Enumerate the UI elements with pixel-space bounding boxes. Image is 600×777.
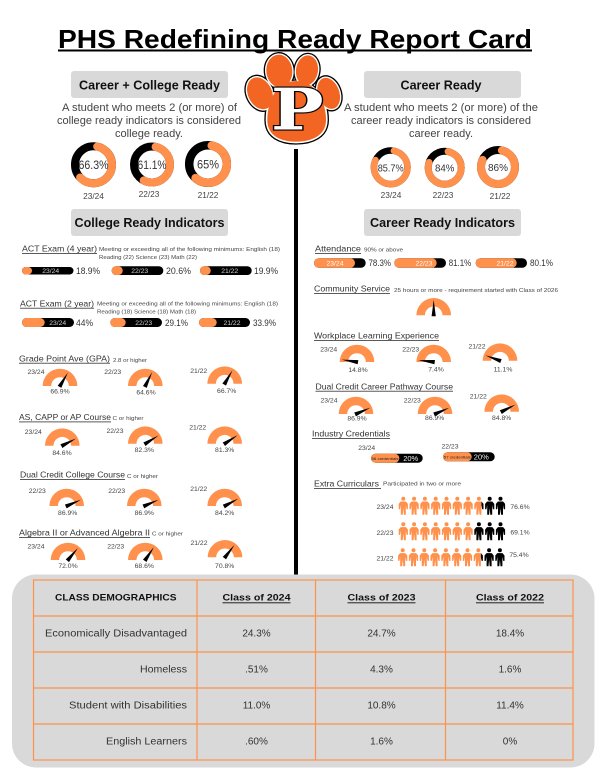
- bar: 22/23 29.1%: [110, 318, 188, 328]
- gauge: 23/24 84.6%: 84.6%: [52, 450, 72, 457]
- heading: Career Ready: Career Ready: [400, 78, 482, 92]
- table header: CLASS DEMOGRAPHICS: [55, 593, 176, 604]
- pictogram: 22/23 69.1%: 22/23: [376, 530, 394, 537]
- gauge: 23/24 14.8%: [320, 345, 374, 374]
- panel: ACT Exam 4 year: [22, 244, 280, 276]
- pictogram: 23/24 76.6%: 23/24: [376, 504, 394, 511]
- bar: 22/23 29.1%: 29.1%: [165, 318, 188, 328]
- bar: 22/23 20.6%: [112, 266, 191, 276]
- donut: college 23/24 66.3%: 66.3%: [78, 160, 108, 172]
- row: Homeless: .51%: [245, 665, 268, 676]
- gauge: 22/23 86.9%: 22/23: [29, 488, 46, 495]
- gauge: 22/23 86.9%: 86.9%: [58, 510, 77, 517]
- panel: Dual Credit College Course: [20, 470, 242, 517]
- panel: AS, CAPP or AP Course: [19, 412, 242, 457]
- heading: College Ready Indicators: [71, 209, 228, 236]
- panel: Extra Curriculars: [314, 479, 530, 566]
- text block: college ready definition: A student who meets 2 (or more) of: [62, 102, 238, 114]
- bar: 21/22 80.1%: 21/22: [496, 260, 514, 267]
- gauge: 21/22 66.7%: [190, 366, 242, 395]
- donut: college 21/22 65%: [189, 145, 227, 200]
- table header: Class of 2023: [348, 593, 416, 604]
- pictogram: 22/23 69.1%: 69.1%: [510, 530, 530, 537]
- gauge: 21/22 81.3%: 81.3%: [215, 447, 234, 454]
- row: Economically Disadvantaged: [45, 629, 524, 640]
- text block: college ready definition: college ready.: [115, 128, 183, 140]
- row: Student with Disabilities: [69, 701, 524, 712]
- bar: 21/22 33.9%: 33.9%: [253, 318, 276, 328]
- text block: career ready definition: career ready indicators is considered: [351, 115, 531, 127]
- gauge: 23/24 72.0%: [27, 543, 85, 570]
- panel: Dual Credit Career Pathway Course: [316, 381, 519, 422]
- donut: career 23/24 85.7%: 85.7%: [378, 162, 404, 174]
- bar: 21/22 33.9%: 21/22: [223, 320, 241, 327]
- gauge: 21/22 11.1%: [468, 343, 517, 374]
- panel: Algebra II: [19, 528, 242, 570]
- row: English Learners: 0%: [503, 737, 517, 748]
- bar: 23/24 44%: [22, 318, 93, 328]
- bar: 23/24 18.9%: 18.9%: [76, 266, 100, 276]
- gauge: 23/24 72.0%: 23/24: [27, 543, 45, 550]
- heading: Career Ready Indicators: [364, 209, 521, 236]
- heading: Career Ready: [364, 71, 521, 98]
- gauge: 22/23 86.9%: 86.9%: [425, 415, 444, 422]
- donut: career 21/22 86%: 86%: [488, 162, 508, 174]
- panel: Community Service: 25 hours or more - requirement started with Class of 2026: [394, 288, 558, 294]
- row: Homeless: Homeless: [140, 665, 187, 676]
- panel: Extra Curriculars: Extra Curriculars: [314, 479, 379, 489]
- row: Student with Disabilities: Student with Disabilities: [69, 701, 187, 712]
- row: Homeless: [140, 665, 522, 676]
- text block: career ready definition: career ready.: [409, 128, 473, 140]
- panel: Extra Curriculars: Participated in two or more: [383, 481, 461, 487]
- donut: career 22/23 84%: [428, 151, 461, 200]
- donut: college 23/24 66.3%: 23/24: [83, 191, 104, 201]
- text block: career ready definition: A student who meets 2 (or more) of the: [344, 102, 538, 114]
- panel: ACT Exam 2 year: ACT Exam (2 year): [20, 298, 94, 308]
- bar: 22/23 57 credentials 20%: 57 credentials: [444, 455, 471, 460]
- row: Homeless: 4.3%: [370, 665, 393, 676]
- bar: 21/22 80.1%: 80.1%: [530, 258, 553, 268]
- gauge: 21/22 11.1%: 11.1%: [494, 366, 512, 374]
- row: English Learners: 1.6%: [370, 737, 393, 748]
- gauge: 22/23 7.4%: [402, 345, 451, 374]
- bar: 23/24 18.9%: 23/24: [42, 268, 59, 275]
- gauge: 22/23 7.4%: 7.4%: [428, 366, 444, 374]
- bar: 22/23 57 credentials 20%: 22/23: [441, 444, 459, 451]
- bar: 23/24 18.9%: [22, 266, 100, 276]
- panel: Workplace Learning Experience: Workplace Learning Experience: [314, 331, 439, 341]
- panel: Workplace Learning Experience: [314, 331, 517, 374]
- bar: 21/22 19.9%: 21/22: [221, 268, 238, 275]
- gauge: 23/24 86.9%: 23/24: [320, 397, 338, 404]
- row: Student with Disabilities: 11.0%: [243, 701, 270, 712]
- gauge: 21/22 66.7%: 66.7%: [217, 388, 236, 395]
- gauge: 22/23 68.6%: [107, 543, 163, 570]
- heading: Career Ready Indicators: Career Ready Indicators: [370, 216, 515, 230]
- row: Economically Disadvantaged: 24.3%: [242, 629, 271, 640]
- gauge: 21/22 70.8%: [190, 540, 242, 570]
- row: English Learners: [106, 737, 517, 748]
- gauge: 22/23 64.6%: [104, 369, 163, 396]
- donut: college 22/23 61.1%: 22/23: [139, 189, 160, 199]
- gauge: 23/24 14.8%: 23/24: [320, 347, 337, 354]
- pictogram: 23/24 76.6%: [376, 497, 530, 515]
- gauge: 22/23 64.6%: 64.6%: [136, 390, 156, 396]
- row: Student with Disabilities: 10.8%: [367, 701, 396, 712]
- panel: Algebra II: C or higher: [152, 532, 183, 538]
- gauge: 21/22 11.1%: 21/22: [468, 344, 486, 351]
- pictogram: 21/22 75.4%: 75.4%: [509, 552, 529, 559]
- bar: 22/23 81.1%: [394, 258, 471, 268]
- gauge: 21/22 84.8%: 84.8%: [492, 415, 511, 422]
- panel: ACT Exam 2 year: Meeting or exceeding all of the following minimums: English (18): [97, 302, 278, 308]
- bar: 23/24 44%: 44%: [76, 318, 93, 328]
- donut: college 22/23 61.1%: [134, 146, 170, 199]
- row: English Learners: .60%: [245, 737, 268, 748]
- bar: 22/23 57 credentials 20%: [441, 444, 495, 462]
- heading: Career + College Ready: [71, 71, 228, 98]
- panel: ACT Exam 2 year: [20, 298, 278, 328]
- panel: Dual Credit Career Pathway Course: Dual Credit Career Pathway Course: [316, 381, 453, 391]
- gauge: 21/22 84.2%: 84.2%: [215, 510, 234, 517]
- title: PHS Redefining Ready Report Card: [58, 24, 532, 54]
- gauge: 22/23 86.9% second: 22/23: [108, 488, 125, 495]
- bar: 23/24 56 credentials 20%: [358, 445, 423, 463]
- panel: Dual Credit College Course: Dual Credit College Course: [20, 470, 125, 480]
- panel: class demographics background: [12, 574, 594, 768]
- row: Economically Disadvantaged: Economically Disadvantaged: [45, 629, 187, 640]
- gauge: 23/24 84.6%: 23/24: [25, 429, 42, 436]
- panel: Community Service: Community Service: [314, 284, 390, 294]
- gauge: 23/24 86.9%: 86.9%: [347, 416, 367, 422]
- donut: career 23/24 85.7%: 23/24: [381, 190, 402, 200]
- donut: career 22/23 84%: 22/23: [433, 190, 454, 200]
- gauge: 23/24 72.0%: 72.0%: [58, 563, 78, 570]
- gauge: 22/23 7.4%: 22/23: [402, 347, 419, 354]
- panel: Algebra II: Algebra II or Advanced Algebra II: [19, 528, 150, 538]
- gauge: 21/22 81.3%: [189, 424, 242, 454]
- gauge: 23/24 66.9%: 23/24: [27, 369, 45, 376]
- donut: career 21/22 86%: 21/22: [490, 191, 511, 201]
- table: class demographics: [34, 580, 573, 760]
- donut: college 21/22 65%: 21/22: [198, 190, 219, 200]
- donut: career 21/22 86%: [481, 150, 515, 201]
- gauge: 21/22 70.8%: 21/22: [190, 540, 208, 547]
- donut: college 23/24 66.3%: [75, 146, 112, 201]
- gauge: 22/23 82.3%: [106, 426, 163, 454]
- gauge: 22/23 68.6%: 68.6%: [135, 563, 154, 570]
- gauge: 21/22 84.2%: [190, 486, 242, 517]
- centre divider line: [294, 149, 298, 576]
- bar: 23/24 56 credentials 20%: 23/24: [358, 445, 375, 452]
- gauge: 21/22 81.3%: 21/22: [189, 424, 206, 431]
- donut: college 22/23 61.1%: 61.1%: [138, 160, 166, 172]
- table header: Class of 2024: [222, 593, 291, 604]
- panel: Attendance: 90% or above: [364, 248, 403, 254]
- gauge: 21/22 84.2%: 21/22: [190, 486, 207, 493]
- gauge: 22/23 86.9%: [404, 397, 452, 422]
- text block: career ready definition: [344, 102, 538, 140]
- panel: Industry Credentials: Industry Credentials: [312, 429, 390, 439]
- gauge: 22/23 82.3%: 82.3%: [135, 447, 154, 454]
- bar: 23/24 78.3%: 23/24: [326, 260, 344, 267]
- bar: 22/23 81.1%: 81.1%: [449, 258, 471, 268]
- row: English Learners: English Learners: [106, 737, 187, 748]
- gauge: 21/22 70.8%: 70.8%: [215, 563, 234, 570]
- pictogram: 22/23 69.1%: [376, 522, 530, 540]
- pictogram: 21/22 75.4%: [376, 548, 529, 566]
- bar: 21/22 33.9%: [199, 318, 276, 328]
- gauge: 22/23 64.6%: 22/23: [104, 369, 121, 376]
- donut: career 22/23 84%: 84%: [435, 163, 454, 175]
- bar: 23/24 56 credentials 20%: 56 credentials: [372, 456, 398, 461]
- panel: ACT Exam 2 year: Reading (18) Science (18) Math (18): [97, 309, 196, 315]
- panel: Grade Point Ave: Grade Point Ave (GPA): [19, 353, 110, 363]
- gauge: 21/22 84.8%: [470, 394, 519, 422]
- bar: 22/23 81.1%: 22/23: [415, 260, 433, 267]
- gauge: 23/24 86.9%: [320, 397, 373, 422]
- bar: 23/24 56 credentials 20%: 20%: [403, 454, 419, 463]
- bar: 22/23 57 credentials 20%: 20%: [474, 453, 489, 462]
- bar: 21/22 19.9%: [200, 266, 278, 276]
- gauge: 22/23 86.9% second: [108, 488, 162, 517]
- gauge: 22/23 86.9% second: 86.9%: [135, 510, 154, 517]
- gauge: community service: [416, 298, 451, 316]
- gauge: 21/22 66.7%: 21/22: [190, 368, 207, 375]
- bar: 22/23 20.6%: 22/23: [131, 268, 148, 275]
- panel: AS, CAPP or AP Course: AS, CAPP or AP Course: [19, 412, 111, 422]
- panel: ACT Exam 4 year: Meeting or exceeding all of the following minimums: English (18): [99, 247, 280, 253]
- panel: Dual Credit College Course: C or higher: [127, 474, 158, 480]
- gauge: 21/22 84.8%: 21/22: [470, 394, 487, 401]
- gauge: 22/23 82.3%: 22/23: [106, 428, 124, 435]
- row: Student with Disabilities: 11.4%: [496, 701, 524, 712]
- table header: Class of 2022: [476, 593, 544, 604]
- text block: college ready definition: [57, 102, 241, 140]
- icon: paw logo: P: [271, 77, 324, 144]
- gauge: 22/23 86.9%: [29, 488, 84, 517]
- row: Economically Disadvantaged: 24.7%: [367, 629, 396, 640]
- gauge: 22/23 86.9%: 22/23: [404, 397, 421, 404]
- pictogram: 21/22 75.4%: 21/22: [376, 555, 394, 562]
- donut: college 21/22 65%: 65%: [197, 160, 219, 172]
- row: Homeless: 1.6%: [499, 665, 522, 676]
- gauge: 23/24 66.9%: [27, 369, 77, 396]
- panel: ACT Exam 4 year: Reading (22) Science (23) Math (22): [99, 255, 197, 261]
- gauge: 23/24 14.8%: 14.8%: [348, 367, 368, 374]
- bar: 21/22 19.9%: 19.9%: [254, 266, 278, 276]
- donut: career 23/24 85.7%: [374, 150, 408, 200]
- bar: 22/23 29.1%: 22/23: [135, 320, 152, 327]
- panel: Grade Point Ave: 2.8 or higher: [113, 358, 147, 364]
- panel: ACT Exam 4 year: ACT Exam (4 year): [22, 244, 97, 254]
- panel: Attendance: [314, 244, 553, 268]
- heading: Career + College Ready: Career + College Ready: [79, 78, 220, 92]
- panel: Industry Credentials: [312, 429, 495, 463]
- heading: College Ready Indicators: College Ready Indicators: [74, 216, 225, 230]
- text block: college ready definition: college ready indicators is considered: [57, 115, 241, 127]
- row: Economically Disadvantaged: 18.4%: [496, 629, 524, 640]
- icon: paw logo: [242, 53, 345, 144]
- bar: 23/24 78.3%: [314, 258, 391, 268]
- bar: 23/24 44%: 23/24: [49, 320, 66, 327]
- panel: Grade Point Ave: [19, 353, 242, 396]
- bar: 22/23 20.6%: 20.6%: [166, 266, 191, 276]
- panel: Community Service: [314, 284, 558, 316]
- panel: Attendance: Attendance: [315, 244, 361, 254]
- gauge: 23/24 84.6%: [25, 428, 80, 457]
- pictogram: 23/24 76.6%: 76.6%: [510, 504, 530, 511]
- panel: AS, CAPP or AP Course: C or higher: [112, 416, 144, 422]
- gauge: 22/23 68.6%: 22/23: [107, 543, 124, 550]
- gauge: 23/24 66.9%: 66.9%: [50, 388, 70, 396]
- bar: 23/24 78.3%: 78.3%: [368, 258, 391, 268]
- table header: [55, 593, 544, 604]
- bar: 21/22 80.1%: [476, 258, 553, 268]
